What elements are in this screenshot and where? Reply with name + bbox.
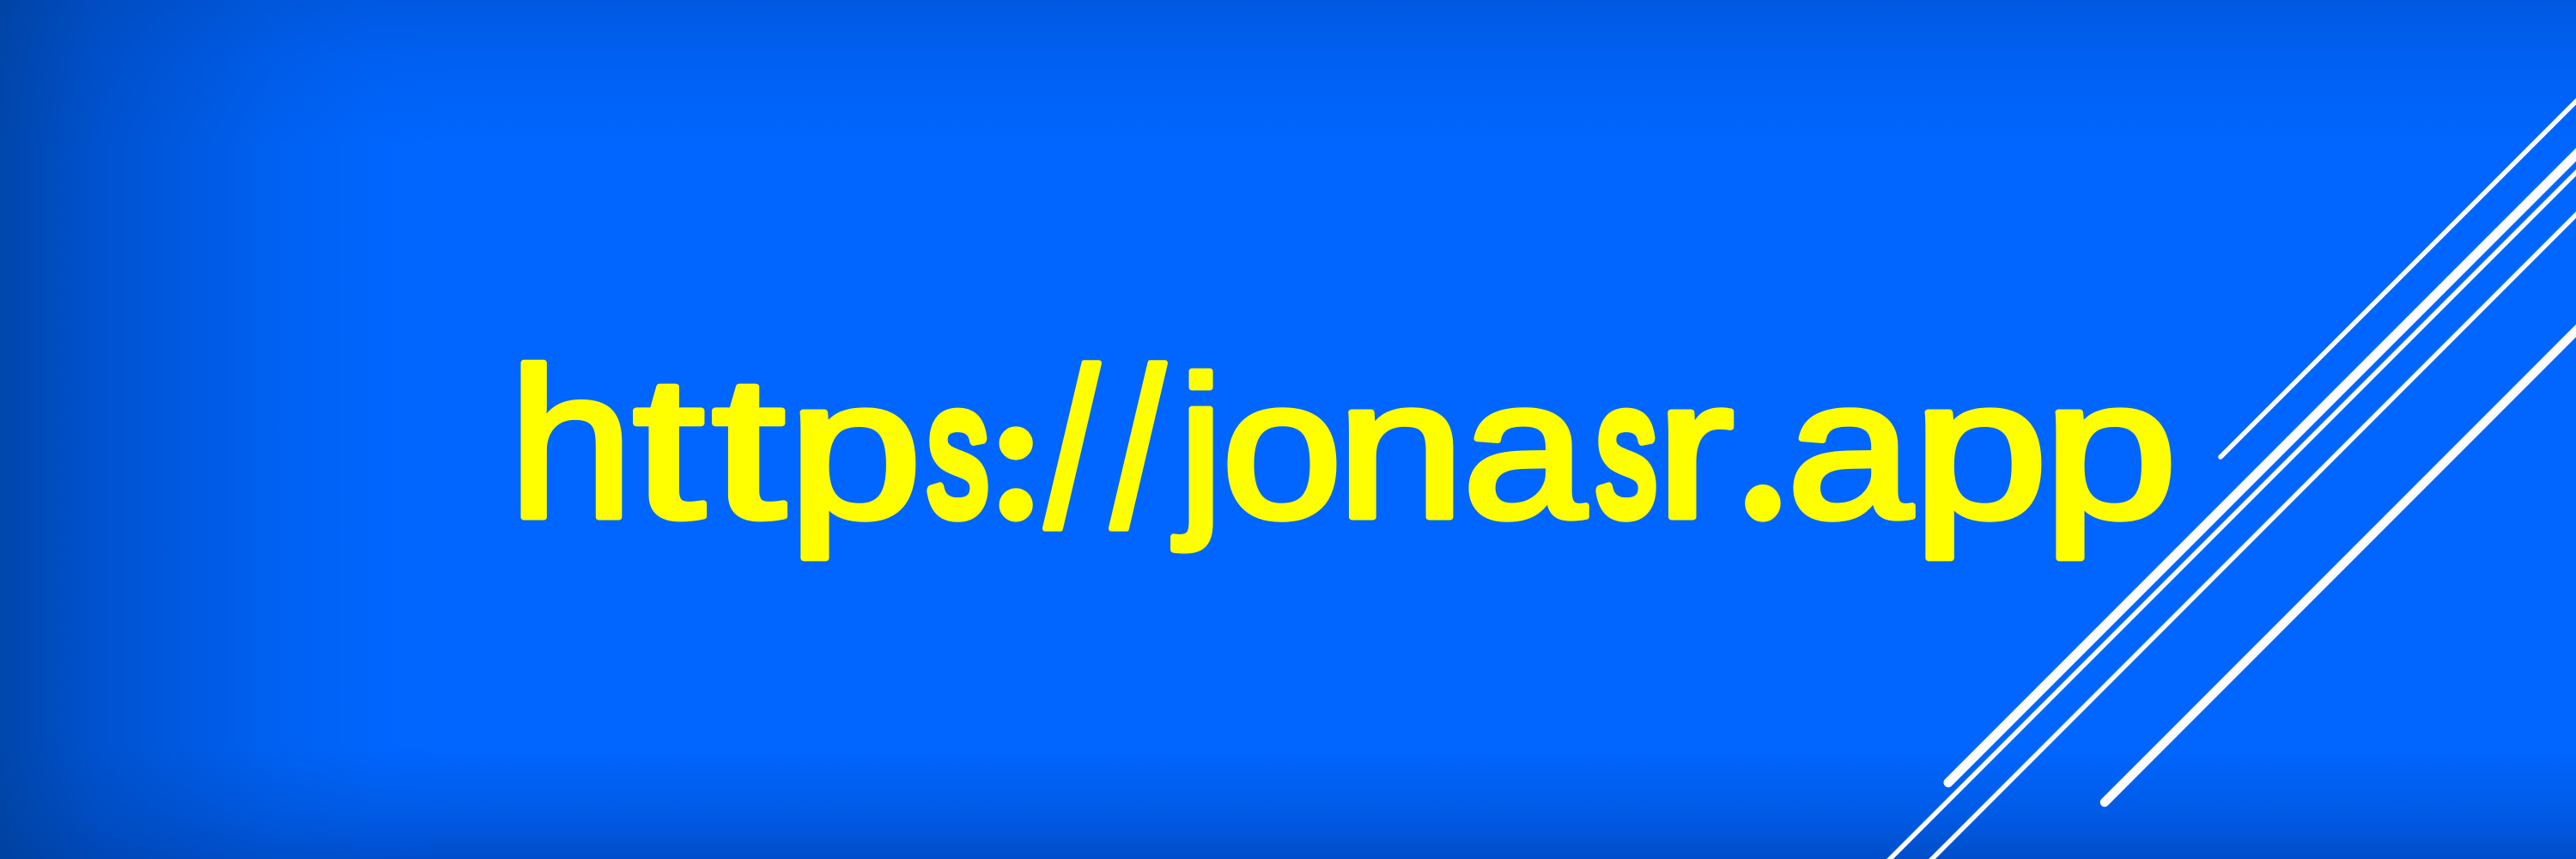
title: URL: s (1596, 346, 1656, 555)
title: URL: . (1742, 359, 1783, 549)
title: URL: a (1787, 338, 1912, 559)
title: URL: a (1462, 338, 1586, 559)
title: URL: p (788, 338, 922, 559)
title: URL: r (1656, 338, 1735, 559)
title: URL: s (927, 346, 988, 555)
title: URL: : (993, 362, 1040, 550)
title: URL: t (712, 334, 786, 560)
title: URL: t (633, 334, 705, 560)
diagonal white lines (1880, 84, 2576, 859)
title: URL: p (1913, 338, 2048, 559)
title: URL: o (1222, 338, 1342, 559)
title: URL: j (1173, 337, 1224, 551)
title: URL (508, 323, 2178, 575)
title: URL: n (1336, 338, 1465, 559)
title: URL: h (508, 324, 634, 563)
title: URL: / (1045, 323, 1100, 575)
title: URL: p (2044, 338, 2178, 559)
title: URL: / (1111, 323, 1166, 575)
